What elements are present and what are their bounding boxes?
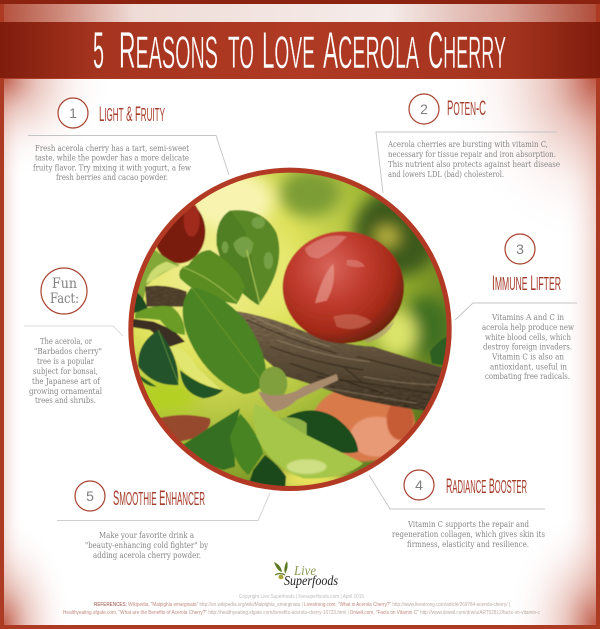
connector 3 [455,303,577,320]
heading 1: LIGHT & FRUITY [99,103,165,126]
text 5 [85,530,208,560]
title: 5 [93,22,104,80]
text 2: necessary for tissue repair and iron absorption. [388,149,556,159]
connector 2 [376,132,557,193]
number badge 2 [409,94,439,124]
number badge 3: 3 [516,241,524,257]
text 3: combating free radicals. [485,371,570,381]
text 2: Acerola cherries are bursting with vitamin C, [387,139,548,149]
text fun fact: The acerola, or [40,336,92,346]
references: Healthyeating.sfgate.com, "What are the Benefits of Acerola Cherry?" http://healthyeating.sfgate.com/benefits-acerola-cherry-10723.html | Drweil.com, "Facts on Vitamin C" http://www.drweil.com/drw/u/ART02812/facts-on-vitamin-c [63,610,540,616]
text 3: white blood cells, which [485,332,572,342]
panel 4: Radiance Booster [369,470,545,549]
panel: Fun Fact [24,268,123,405]
text 3: acerola help produce new [482,322,575,332]
left leaf [135,306,185,335]
text 1: fruity flavor. Try mixing it with yogurt, a few [33,162,192,172]
text: CHERRY [428,22,506,80]
small cherry top left [153,200,205,263]
text 4: regeneration collagen, which gives skin its [392,529,545,539]
text 2: and lowers LDL (bad) cholesterol. [388,169,504,179]
number badge 1 [58,98,88,128]
lower cherry [312,385,415,462]
header band [0,22,600,78]
title: REASONS [119,22,218,80]
connector fun fact [24,326,123,336]
heading 2: POTEN-C [447,97,486,120]
text 3: Vitamin C is also an [491,352,565,362]
top left leaves [137,248,180,300]
branch left segment [145,286,187,307]
title [93,22,506,80]
panel 5: Smoothie Enhancer [57,481,270,560]
number badge 1: 1 [69,105,77,121]
photo circle: acerola cherry on a branch [123,163,457,497]
right small leaf [430,336,446,366]
text fun fact: tree is a popular [37,356,94,366]
dark lower right leaf [278,410,358,453]
twig [258,374,338,412]
bottom left fruit [158,415,210,442]
text fun fact: "Barbados cherry" [34,346,102,356]
text 1 [33,143,192,182]
second leaf [146,250,245,304]
number badge 4: 4 [415,477,423,493]
text 3 [482,312,575,381]
references [63,602,540,616]
text 5: "beauty-enhancing cold fighter" by [85,540,208,550]
text fun fact [29,336,102,405]
panel 2: Poten-C [376,94,560,193]
text fun fact: trees and shrubs. [35,395,96,405]
logo wordmark: Live [293,564,316,579]
text fun fact: the Japanese art of [32,376,101,386]
text 5: adding acerola cherry powder. [93,550,201,560]
text 2: This nutrient also protects against heart disease [388,159,560,169]
text 1: taste, while the powder has a more delicate [35,152,189,162]
title: LOVE [262,22,315,80]
text 3: antioxidant, useful in [490,362,568,372]
text fun fact: subject for bonsai, [33,366,98,376]
heading 4: RADIANCE BOOSTER [446,475,527,498]
main cherry [283,231,404,343]
heading 5: SMOOTHIE ENHANCER [113,487,205,510]
fun fact badge: Fact: [50,291,79,307]
cluster at node [259,367,287,400]
lower left dark leaves [137,330,223,398]
text 4: Vitamin C supports the repair and [407,519,530,529]
text 3: Vitamins A and C in [491,312,565,322]
connector 1 [28,136,229,175]
text fun fact: growing ornamental [29,386,102,396]
connector 4 [369,475,545,509]
title: ACEROLA [323,22,419,80]
text 4 [392,519,545,549]
logo wordmark [284,564,338,589]
fun fact badge [41,268,87,314]
number badge 5 [75,481,105,511]
top leaf [216,210,279,305]
logo wordmark: Superfoods [284,574,338,589]
text 3: destroy foreign invaders. [483,342,572,352]
text 1: fresh berries and cacao powder. [56,172,168,182]
references: REFERENCES: Wikipedia, "Malpighia emarginata" http://en.wikipedia.org/wiki/Malpighia_emarginata | Livestrong.com, "What is Acerola Cherry?" http://www.livestrong.com/article/269784-acerola-cherry/ | [94,602,510,608]
text 4: firmness, elasticity and resilience. [407,539,529,549]
number badge 4 [404,470,434,500]
panel 3: Immune Lifter [455,234,577,381]
lower dark leaves [180,408,286,490]
text 1: Fresh acerola cherry has a tart, semi-sweet [35,143,190,153]
copyright line: Copyright Live Superfoods | livesuperfoods.com | April 2015 [239,594,364,600]
heading 3: IMMUNE LIFTER [492,272,561,295]
branch [233,311,445,411]
connector 5 [57,493,270,520]
panel 1: Light & Fruity [28,98,229,182]
text 2 [387,139,560,179]
big centre leaf [183,287,266,394]
number badge 2: 2 [420,101,428,117]
number badge 3 [505,234,535,264]
fun fact badge: Fun [52,276,77,292]
icon: olive sprig [274,561,288,579]
text 5: Make your favorite drink a [99,530,194,540]
title: TO [228,27,254,78]
number badge 5: 5 [86,488,94,504]
logo: Live Superfoods [274,561,338,589]
bright bottom leaf [254,403,363,478]
